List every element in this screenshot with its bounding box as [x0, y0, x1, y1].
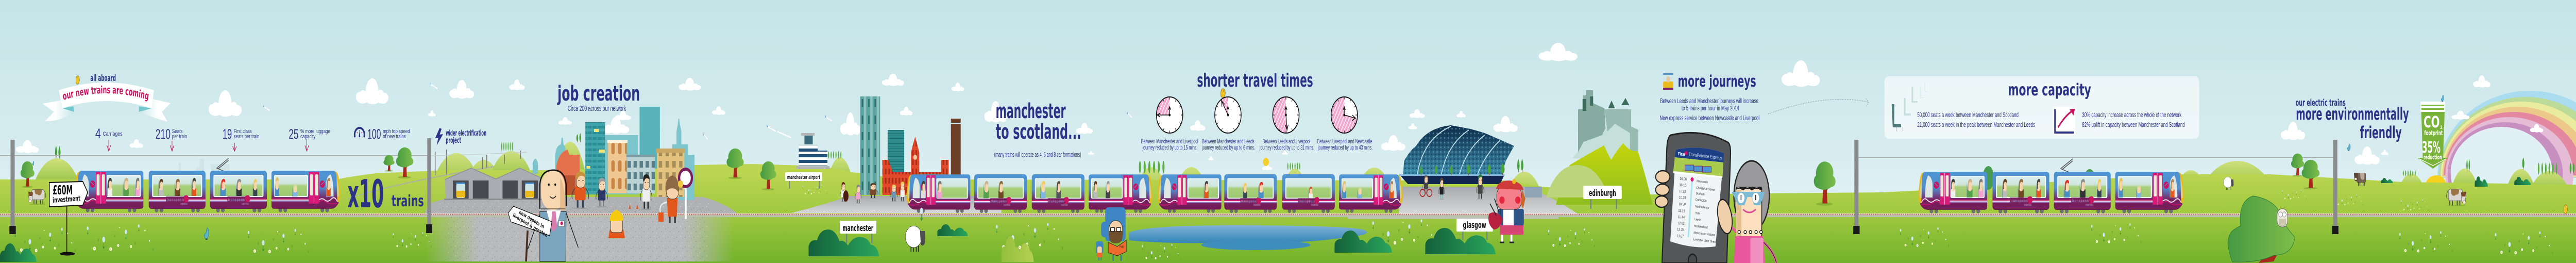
environment section: [2296, 97, 2409, 142]
plaza: manchester: [791, 196, 1002, 213]
wire 2: [1858, 157, 2334, 158]
stat: 25% more luggage: 25: [289, 127, 298, 142]
timetable rows: 10.15: [1679, 183, 1687, 188]
co2 reduction arrow: 35%: [2422, 139, 2441, 157]
train 3: [1158, 174, 1403, 213]
depot building: [444, 168, 542, 200]
timetable rows: [1676, 177, 1717, 244]
owl on tree: [2277, 209, 2287, 227]
icon: fading row of seats: [1892, 83, 1927, 132]
plane 2: [431, 83, 438, 90]
more journeys block: to 5 trains per hour in May 2014: [1682, 105, 1739, 112]
bush bottom left: [0, 243, 37, 262]
ribbon: [59, 83, 154, 108]
co2 reduction arrow: footprint: [2425, 130, 2443, 137]
icon: yellow chick: [76, 76, 79, 84]
new depots sign: new depots in: [518, 210, 545, 230]
new depots manager character: [525, 170, 578, 261]
environment section: friendly: [2360, 123, 2402, 142]
stat: 19 first class seats: seats per train: [234, 134, 259, 140]
shorter travel times heading: shorter travel times: [1197, 70, 1313, 91]
plane with contrail: [767, 124, 791, 138]
clouds: [16, 43, 2490, 170]
stat: 25% more luggage: [289, 127, 330, 151]
smartphone timetable: First: [1677, 151, 1686, 157]
stat: 210 seats: 210: [156, 127, 171, 142]
timetable rows: York: [1695, 211, 1700, 216]
timetable rows: 10.50: [1679, 202, 1686, 207]
investment signpost: [49, 182, 88, 256]
icon: yellow train in depot: [525, 183, 534, 198]
arrow: [170, 141, 174, 151]
environment section: our electric trains: [2296, 97, 2346, 108]
stat: 4 carriages: 4: [95, 126, 101, 142]
manchester skyline: [860, 96, 961, 196]
plaza: job creation: [425, 197, 738, 261]
chick by track: [2564, 205, 2567, 213]
timetable rows: Manchester Victoria: [1693, 231, 1716, 237]
manchester people: [840, 182, 906, 204]
more journeys block: Between Leeds and Manchester journeys will increase: [1660, 98, 1758, 105]
stat: 100 mph top speed: [354, 127, 410, 142]
edinburgh sign: edinburgh: [1589, 188, 1616, 199]
title block: all aboard banner: [42, 73, 171, 122]
job creation heading: [557, 81, 640, 112]
clock captions: [1141, 138, 1372, 151]
pale city skyline behind first train: [179, 159, 230, 179]
bush small: [2381, 178, 2393, 183]
dandelion at track: [920, 208, 923, 221]
flower patches: [14, 185, 2553, 259]
x10 trains label: x10: [347, 172, 384, 217]
co2 reduction arrow: reduction: [2424, 154, 2442, 161]
hand fingers and thumb: [1655, 171, 1735, 236]
panel: more capacity: 82% uplift in capacity between Manchester and Scotland: [2082, 122, 2185, 128]
pantograph: [2061, 159, 2074, 172]
new depots sign: liverpool & preston: [512, 212, 548, 239]
big foreground tree: [2228, 196, 2295, 263]
icon: sun: [1263, 158, 1269, 166]
edinburgh sign: [1583, 186, 1622, 209]
trees: environment: [2291, 154, 2319, 189]
stat: 25% more luggage: capacity: [300, 134, 315, 140]
investment signpost: investment: [53, 194, 81, 204]
clock captions: journey reduced by up to 6 mins.: [1201, 144, 1255, 151]
city skyline: job creation: [533, 107, 694, 200]
glasgow armadillo building: [1399, 125, 1514, 184]
panel: more capacity: 50,000 seats a week between Manchester and Scotland: [1917, 112, 2019, 119]
clock: 31 minutes: [1273, 97, 1299, 133]
stat: 210 seats: [156, 127, 187, 151]
investment signpost: £60M: [53, 183, 73, 198]
manchester sign: [840, 221, 876, 243]
icon: train front: [1663, 73, 1673, 90]
timetable rows: Darlington: [1696, 198, 1707, 203]
clock captions: journey reduced by up to 31 mins.: [1259, 144, 1314, 151]
clock: 6 minutes: [1215, 97, 1241, 133]
arrow: [233, 143, 236, 151]
plaza edge: glasgow lower: [1348, 217, 1558, 219]
cloud on rainbow arch: [2530, 124, 2544, 133]
clock captions: Between Manchester and Liverpool: [1141, 138, 1198, 145]
timetable stop line: [1688, 177, 1693, 237]
manchester heading: to scotland...: [996, 120, 1081, 144]
clock captions: Between Manchester and Leeds: [1202, 138, 1255, 145]
stat: 19 first class seats: First class: [234, 128, 252, 135]
bush by pond: [1334, 231, 1392, 253]
smartphone timetable: [1662, 133, 1731, 263]
plane 1: [263, 105, 270, 111]
woman holding phone: [1732, 161, 1776, 263]
ground: [0, 164, 2576, 263]
timetable rows: Northallerton: [1695, 205, 1709, 210]
clock captions: Between Leeds and Liverpool: [1263, 138, 1310, 145]
seagull: [703, 133, 708, 140]
stat: 19 first class seats: 19: [223, 127, 232, 142]
bluebirds: [2347, 95, 2444, 151]
scene left: trees, cow and bushes: [21, 161, 35, 188]
manchester sign: manchester: [842, 223, 874, 234]
stat: 100 mph top speed: mph top speed: [383, 128, 410, 135]
cow grazing left: [28, 189, 46, 205]
timetable rows: 10.22: [1679, 189, 1686, 194]
trees near depot: [383, 147, 744, 179]
timetable rows: 10.06: [1680, 177, 1687, 182]
wider electrification project: wider electrification: [446, 129, 486, 138]
stat: 4 carriages: Carriages: [103, 131, 123, 137]
pylon 1: [9, 140, 16, 234]
ribbon tails: [43, 99, 171, 122]
co2 reduction arrow: [2417, 102, 2448, 169]
train 4: [1919, 159, 2184, 213]
timetable rows: 10.39: [1679, 195, 1686, 200]
timetable rows: Liverpool Lime Street: [1693, 238, 1717, 244]
more journeys block: New express service between Newcastle and Liverpool: [1660, 115, 1759, 122]
airport terminal: [796, 133, 829, 169]
manchester heading: [994, 99, 1081, 158]
timetable rows: 11.44: [1678, 215, 1685, 220]
backpacker with map: map: [1120, 245, 1124, 249]
traffic sign: [679, 169, 692, 219]
title block: all aboard banner: our new trains are coming: [63, 86, 149, 102]
wire 1: [0, 155, 429, 156]
stat: 100 mph top speed: of new trains: [383, 134, 406, 140]
bush group manchester: [808, 229, 879, 256]
piper character: [1488, 179, 1526, 242]
trees behind train 4: [1982, 166, 2099, 195]
stat: 210 seats: Seats: [172, 128, 183, 135]
icon: chick on clock: [1221, 89, 1225, 97]
stat: 25% more luggage: % more luggage: [300, 128, 330, 135]
icon: bird on tree: [32, 161, 34, 166]
bushes on right hills: [2475, 176, 2531, 187]
glasgow sign: [1456, 219, 1493, 240]
timetable rows: 13.07: [1676, 234, 1684, 239]
clock: 15 minutes: [1157, 97, 1183, 133]
airport sign: [785, 172, 822, 189]
train 2: [906, 174, 1153, 213]
timetable rows: 12.02: [1677, 221, 1685, 226]
panel: more capacity: 30% capacity increase across the whole of the network: [2082, 112, 2181, 119]
timetable rows: Leeds: [1694, 218, 1701, 222]
pylon 2: [426, 138, 432, 233]
tree and pylon after phone: [1814, 140, 1860, 234]
manchester airport scene: [760, 116, 832, 190]
panel: more capacity: 21,000 seats a week in the peak between Manchester and Leeds: [1917, 122, 2035, 128]
pylon 3: [2332, 140, 2338, 234]
more journeys block: [1660, 73, 1759, 122]
clock captions: journey reduced by up to 43 mins.: [1317, 144, 1372, 151]
panel: more capacity: [1885, 76, 2199, 139]
smartphone timetable: TransPennine Express: [1689, 151, 1722, 161]
x10 trains label: trains: [392, 193, 424, 210]
bush by glasgow sign: [1425, 228, 1496, 254]
plaza: glasgow: [1399, 187, 1578, 213]
icon: growth chart: [2053, 107, 2075, 135]
timetable rows: 11.15: [1678, 209, 1685, 213]
timetable rows: Chester-le-Street: [1696, 186, 1715, 192]
back wall: [1525, 187, 1542, 198]
wider electrification project: project: [446, 136, 461, 145]
environment section: more environmentally: [2296, 104, 2409, 124]
timetable rows: Durham: [1696, 192, 1705, 196]
clock captions: Between Liverpool and Newcastle: [1317, 138, 1372, 145]
edinburgh scene: [1546, 90, 1653, 209]
bluebird on grass: [204, 227, 209, 240]
arrow: [107, 140, 111, 151]
clock captions: journey reduced by up to 15 mins.: [1142, 144, 1197, 151]
small traveller: [1096, 241, 1104, 260]
glasgow sign: glasgow: [1463, 220, 1486, 231]
timetable rows: Newcastle: [1697, 179, 1708, 185]
timetable rows: Huddersfield: [1694, 224, 1708, 229]
curved rail and small poles towards depot: [348, 150, 527, 199]
light bush: [1002, 236, 1033, 262]
backpacker with map: [1101, 207, 1126, 261]
round striped hill: [1546, 165, 1609, 198]
clock: 43 minutes: [1331, 97, 1358, 133]
pantograph: [217, 158, 230, 172]
job creation heading: Circa 200 across our network: [568, 104, 626, 112]
new depots sign: [508, 206, 552, 239]
brown cow: [2354, 173, 2366, 186]
worker in manhole: [608, 210, 625, 238]
icon: yellow train in depot: [456, 183, 465, 198]
icon: lightning bolt: [435, 128, 443, 145]
distant hills and trees: [35, 133, 2574, 198]
timetable rows: 12.35: [1677, 227, 1684, 232]
job creation heading: job creation: [557, 81, 640, 106]
stat: 210 seats: per train: [172, 134, 187, 140]
arrow: [305, 139, 309, 151]
pond: [1129, 225, 1367, 250]
wider electrification project: [435, 128, 486, 145]
bush by sheep: [937, 224, 968, 236]
window cleaner: [658, 175, 683, 223]
plane: [825, 116, 832, 122]
more journeys block: more journeys: [1678, 73, 1756, 91]
hill edinburgh: [1556, 143, 1653, 205]
sheep on hill: [2224, 177, 2233, 190]
sheep on grass: [905, 226, 925, 252]
railway track: [0, 213, 2576, 217]
glasgow people: [1420, 174, 1484, 200]
characters: job creation staff: [572, 172, 652, 210]
stat: 19 first class seats: [223, 127, 259, 151]
stat: 4 carriages: [95, 126, 123, 151]
panel: more capacity: more capacity: [2008, 80, 2091, 100]
seagull: [1127, 111, 1132, 119]
airport sign: manchester airport: [787, 174, 820, 180]
cloud over rainbow: [2452, 111, 2469, 120]
dotted arrow to more capacity: [1768, 98, 1869, 114]
rainbow: [2437, 91, 2576, 233]
manchester heading: manchester: [996, 99, 1066, 123]
stat: 100 mph top speed: 100: [367, 127, 381, 142]
white cow: [2447, 189, 2466, 206]
icon: speedometer gauge: [354, 128, 364, 137]
co2 reduction arrow: 2: [2440, 125, 2443, 130]
train 1: [75, 158, 341, 212]
manchester heading: (many trains will operate as 4, 6 and 8 car formations): [994, 152, 1081, 158]
co2 reduction arrow: CO: [2424, 114, 2439, 132]
mini train on screen: [1685, 165, 1711, 172]
title block: all aboard banner: all aboard: [90, 73, 116, 84]
castle: [1572, 90, 1638, 160]
